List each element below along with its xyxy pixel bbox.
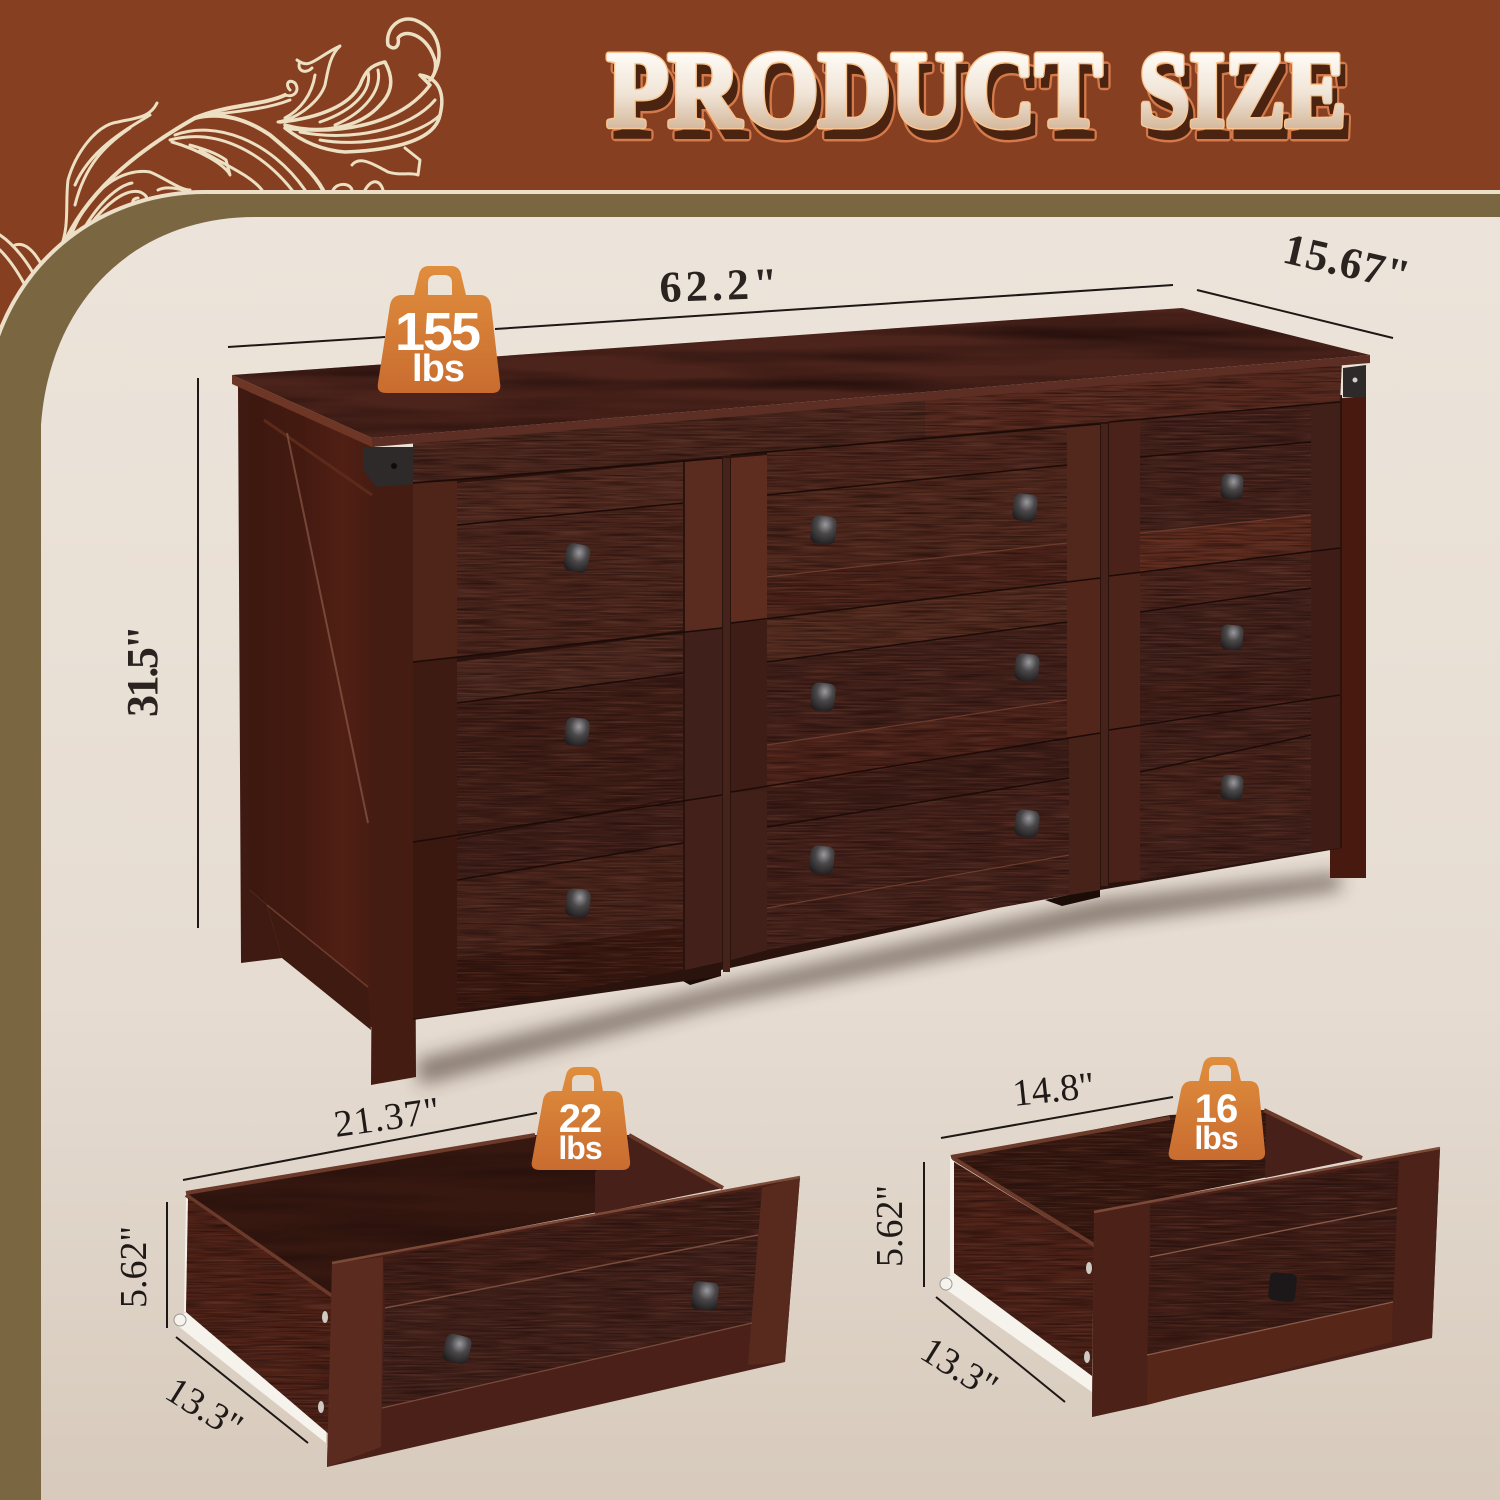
right column stiles (1109, 402, 1340, 883)
column divider strips (723, 424, 1108, 972)
drawer side (186, 1198, 332, 1435)
drawer rim (186, 1135, 723, 1296)
front base (413, 395, 1342, 1020)
title: PRODUCT SIZE: SIZE (1139, 31, 1346, 150)
drawer seams and inset lines (413, 402, 1340, 908)
dimension: large drawer depth 13.3 (158, 1337, 308, 1448)
top front edge (372, 355, 1370, 447)
dimension: overall width 62.2: 62.2" (659, 259, 778, 312)
small drawer (940, 1110, 1440, 1417)
weight tag: 16 lbs: 16 (1195, 1087, 1237, 1131)
left column drawers (457, 462, 683, 1012)
front corner leg (371, 447, 416, 1085)
title: PRODUCT SIZE: SIZE (1145, 42, 1352, 161)
large drawer (174, 1135, 800, 1467)
weight tag: 155 lbs: 155 (395, 302, 480, 362)
side panel (250, 392, 375, 1030)
weight tag: 22 lbs: lbs (558, 1130, 602, 1166)
dimension: large drawer height 5.62: 5.62" (113, 1226, 155, 1308)
dimension: small drawer depth 13.3 (913, 1297, 1065, 1408)
knob (1268, 1272, 1297, 1302)
weight tag: 16 lbs (1169, 1057, 1265, 1160)
weight tag: 22 lbs: 22 (559, 1097, 601, 1141)
right end leg (1330, 396, 1366, 878)
weight tag: 155 lbs: lbs (412, 348, 464, 390)
dimension: large drawer width 21.37: 21.37" (331, 1090, 442, 1146)
middle column drawers (767, 427, 1069, 950)
middle column stiles (731, 424, 1100, 960)
knobs (441, 1281, 719, 1366)
title: PRODUCT SIZE: SIZE (1139, 31, 1346, 150)
title: PRODUCT SIZE (607, 31, 1352, 161)
drawer front (327, 1177, 800, 1467)
metal corner brackets (363, 365, 1366, 487)
right column drawers (1140, 404, 1311, 880)
title: PRODUCT SIZE: SIZE (1145, 42, 1352, 161)
title: PRODUCT SIZE: PRODUCT (613, 42, 1108, 161)
title: PRODUCT SIZE: PRODUCT (607, 31, 1102, 150)
white slide rail (174, 1195, 326, 1443)
dimension: small drawer depth 13.3: 13.3" (913, 1329, 1005, 1408)
title: PRODUCT SIZE: PRODUCT (607, 31, 1102, 150)
left column stiles (413, 458, 722, 1018)
drawer rim (951, 1110, 1362, 1245)
dresser shadow (416, 872, 1340, 1085)
weight tag: 22 lbs (532, 1067, 630, 1170)
dresser (232, 308, 1370, 1085)
drawer interior back wall (951, 1110, 1362, 1246)
title: PRODUCT SIZE: PRODUCT (613, 42, 1108, 161)
screws (318, 1311, 328, 1413)
feet shadows (672, 888, 1100, 985)
weight tag: 155 lbs (378, 266, 500, 393)
screws (1084, 1262, 1092, 1363)
dimension: large drawer depth 13.3: 13.3" (158, 1369, 250, 1448)
drawer interior right wall (1265, 1113, 1362, 1178)
drawer side (954, 1162, 1094, 1376)
dimension: overall width 62.2 (228, 259, 1173, 347)
dimension: large drawer height 5.62 (113, 1202, 167, 1328)
white slide rail (940, 1157, 1092, 1392)
dimension: height 31.5: 31.5" (118, 625, 167, 717)
weight tag: 16 lbs: lbs (1194, 1120, 1238, 1156)
back leg (238, 385, 282, 963)
dimension: large drawer width 21.37 (183, 1090, 537, 1180)
dimension: small drawer height 5.62 (869, 1162, 924, 1287)
top left edge (232, 375, 372, 447)
drawer knobs (563, 473, 1244, 918)
dimension: depth 15.67 (1197, 224, 1414, 338)
decorative floral ornament (0, 19, 442, 295)
dimension: small drawer height 5.62: 5.62" (869, 1185, 911, 1267)
dresser top (232, 308, 1370, 438)
fascia under top (413, 361, 1342, 483)
drawer interior right wall (595, 1138, 723, 1214)
drawer interior back wall (186, 1135, 723, 1295)
dimension: depth 15.67: 15.67" (1279, 224, 1414, 301)
header band background (0, 0, 1500, 420)
dimension: small drawer width 14.8: 14.8" (1011, 1065, 1096, 1115)
drawer front (1092, 1148, 1440, 1417)
dimension: small drawer width 14.8 (941, 1065, 1173, 1138)
